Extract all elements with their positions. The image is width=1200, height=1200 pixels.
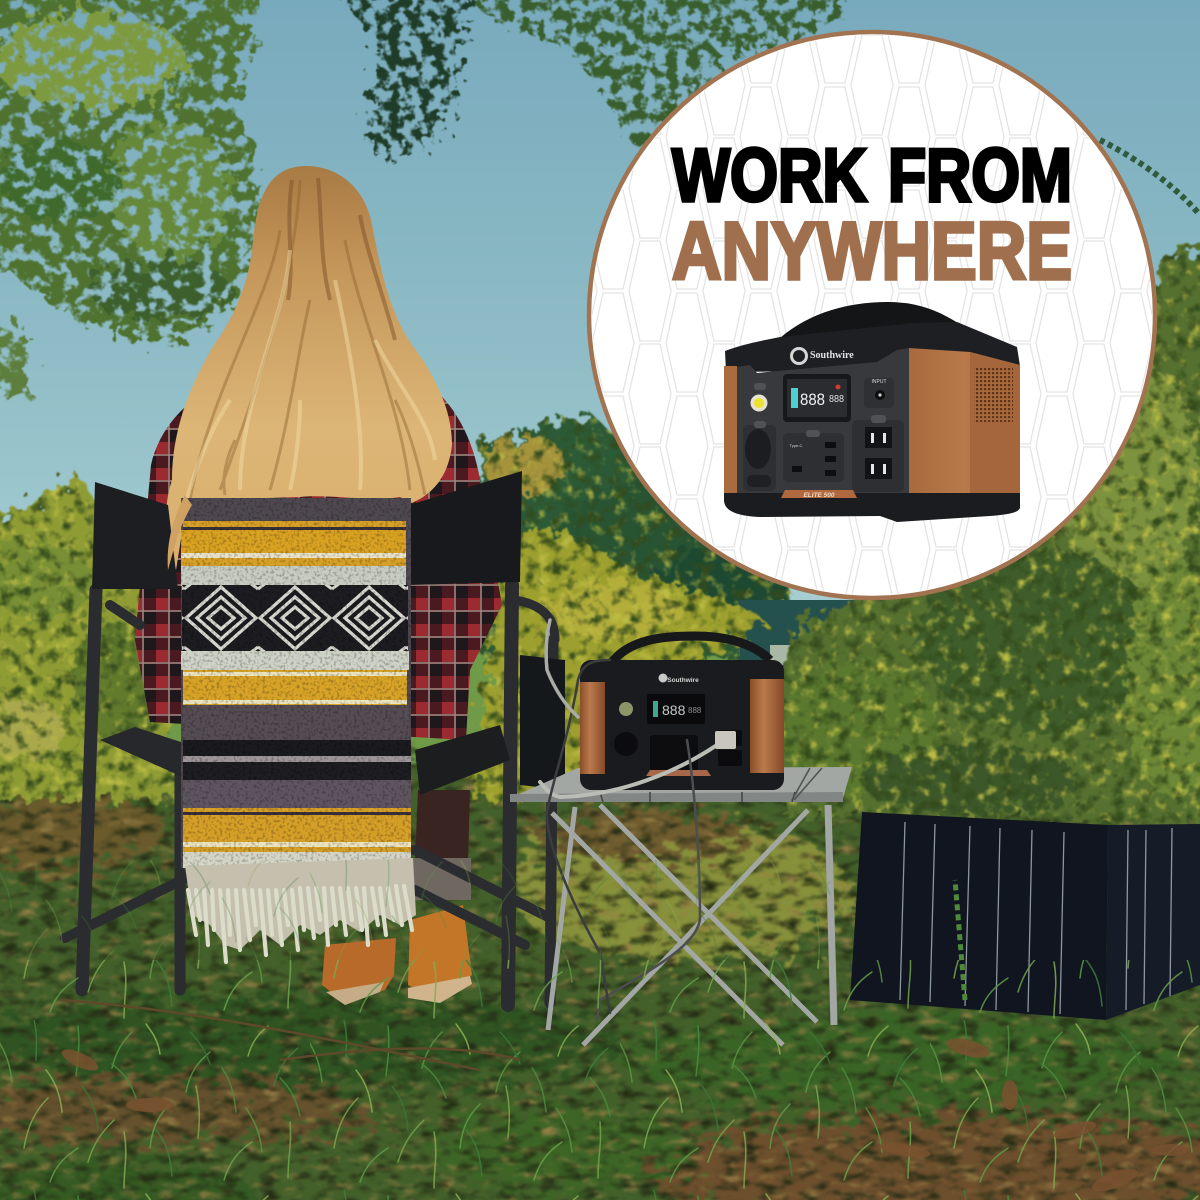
hexagon pattern xyxy=(592,35,1152,595)
folding table xyxy=(510,767,852,1045)
sock xyxy=(413,858,471,900)
sky xyxy=(0,0,1200,640)
foreground grass blades xyxy=(0,860,1200,1200)
right armrest xyxy=(415,725,510,795)
handle xyxy=(612,636,770,662)
brand logo xyxy=(792,348,854,364)
side pouch xyxy=(520,655,565,790)
left copper strip xyxy=(724,366,737,496)
vent grille xyxy=(974,368,1013,422)
centre bushes xyxy=(470,531,765,800)
table legs xyxy=(548,805,834,1045)
camping chair xyxy=(65,471,565,1005)
dc input: INPUT xyxy=(872,379,886,385)
handle xyxy=(780,302,958,345)
lcd display: 888 xyxy=(829,394,844,405)
heading: work from: WORK xyxy=(672,133,867,217)
left copper side xyxy=(580,682,605,774)
table top xyxy=(510,767,852,802)
boots xyxy=(322,905,472,1005)
lake xyxy=(740,600,980,670)
chair frame xyxy=(65,585,555,1005)
display: 888 xyxy=(662,702,686,718)
right copper side xyxy=(750,679,784,773)
far right tree and bushes xyxy=(770,235,1200,830)
heading: work from: FROM xyxy=(888,133,1072,217)
model plate xyxy=(781,490,857,499)
sockets xyxy=(614,702,742,771)
front face xyxy=(737,348,909,496)
striped blanket xyxy=(181,498,416,962)
product: power station xyxy=(724,302,1020,522)
heading: anywhere: ANYWHERE xyxy=(672,206,1072,297)
base xyxy=(724,493,1020,522)
lcd display: 888 xyxy=(800,390,825,409)
top body xyxy=(725,322,1020,372)
usb ports xyxy=(783,430,844,482)
nameplate xyxy=(646,770,711,776)
person xyxy=(135,166,502,1005)
display xyxy=(647,694,705,724)
fallen leaves xyxy=(59,1035,1188,1196)
model plate: ELITE 500 xyxy=(803,492,835,499)
top centre tree branches xyxy=(335,0,860,165)
led light xyxy=(750,383,768,412)
left armrest xyxy=(100,727,190,778)
power station on table xyxy=(540,620,784,1020)
long blonde hair xyxy=(166,166,452,570)
callout badge xyxy=(589,32,1155,598)
distant forest xyxy=(478,412,790,660)
plaid shirt xyxy=(135,368,502,740)
brand label: Southwire xyxy=(667,677,699,684)
car socket xyxy=(743,421,776,491)
badge circle xyxy=(589,32,1155,598)
grass and ground xyxy=(0,760,1200,1200)
right back flap xyxy=(407,471,522,585)
legs xyxy=(415,790,470,865)
heading: work from xyxy=(672,133,1072,217)
solar panel xyxy=(850,812,1200,1020)
brand logo: Southwire xyxy=(810,350,854,361)
fringe xyxy=(185,858,416,962)
left back flap xyxy=(92,482,178,589)
side copper panel xyxy=(909,348,1020,496)
hanging vine, top right xyxy=(1100,140,1200,215)
left tree canopy xyxy=(0,0,258,395)
dc input xyxy=(864,378,894,408)
display: 888 xyxy=(688,706,702,715)
usb ports: Type-C xyxy=(790,443,803,448)
left bushes xyxy=(0,470,180,800)
body xyxy=(580,660,784,790)
loose hair strand xyxy=(168,495,192,570)
ac outlets xyxy=(852,415,904,492)
lcd display xyxy=(783,374,851,422)
cables xyxy=(540,620,736,1020)
